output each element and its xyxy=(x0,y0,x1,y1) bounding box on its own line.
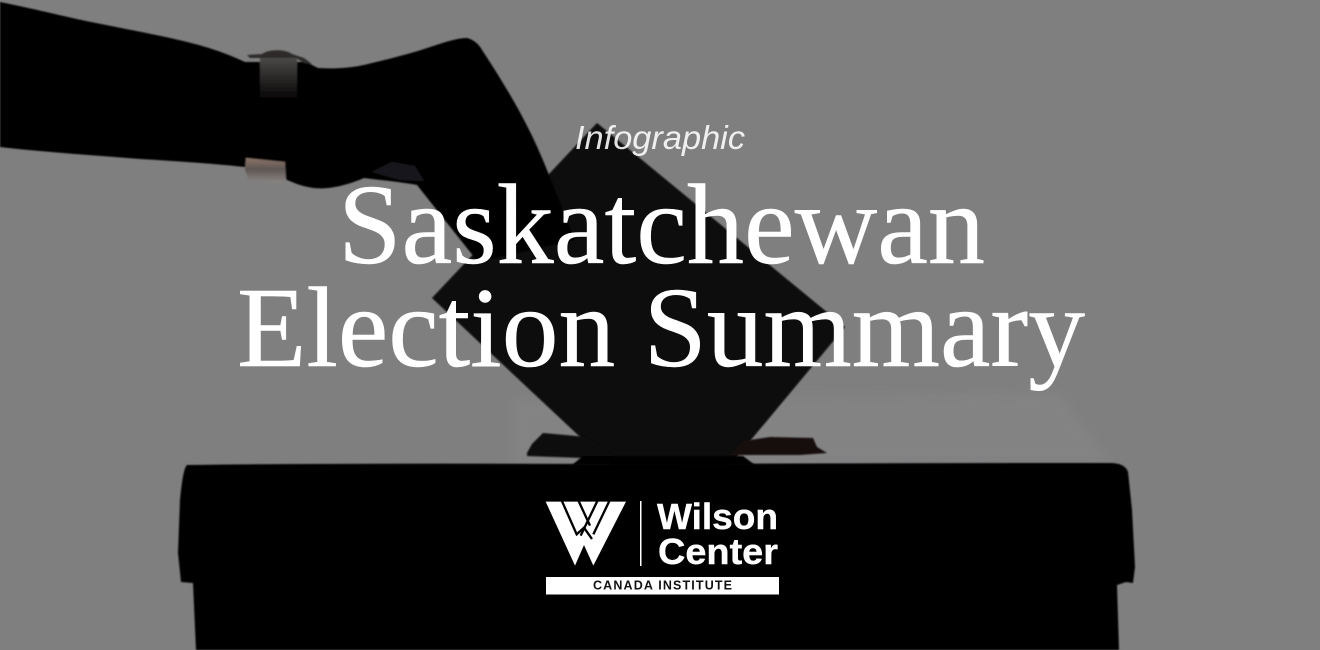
ballot box top surface xyxy=(512,394,1110,463)
title line 2: Election Summary xyxy=(237,264,1085,391)
title line 1: Saskatchewan xyxy=(338,161,985,288)
ballot box slot torn edges xyxy=(527,433,827,465)
logo divider xyxy=(640,501,642,566)
logo wordmark xyxy=(657,496,778,572)
title xyxy=(237,161,1085,391)
wordmark: Wilson: Wilson xyxy=(657,496,778,537)
watch strap lower xyxy=(245,158,286,183)
eyebrow: Infographic: Infographic xyxy=(575,119,746,156)
hand and forearm silhouette xyxy=(0,2,575,262)
logo bar xyxy=(546,577,779,594)
watch strap upper xyxy=(260,58,297,98)
logo: Wilson Center Canada Institute xyxy=(546,496,779,594)
wordmark: Center: Center xyxy=(658,531,778,572)
icon: W mark xyxy=(546,500,626,566)
logo bar text: CANADA INSTITUTE xyxy=(593,578,732,592)
watch case xyxy=(247,50,312,64)
hand shading xyxy=(372,162,424,181)
ballot card xyxy=(432,123,845,465)
ballot box silhouette xyxy=(178,463,1135,650)
